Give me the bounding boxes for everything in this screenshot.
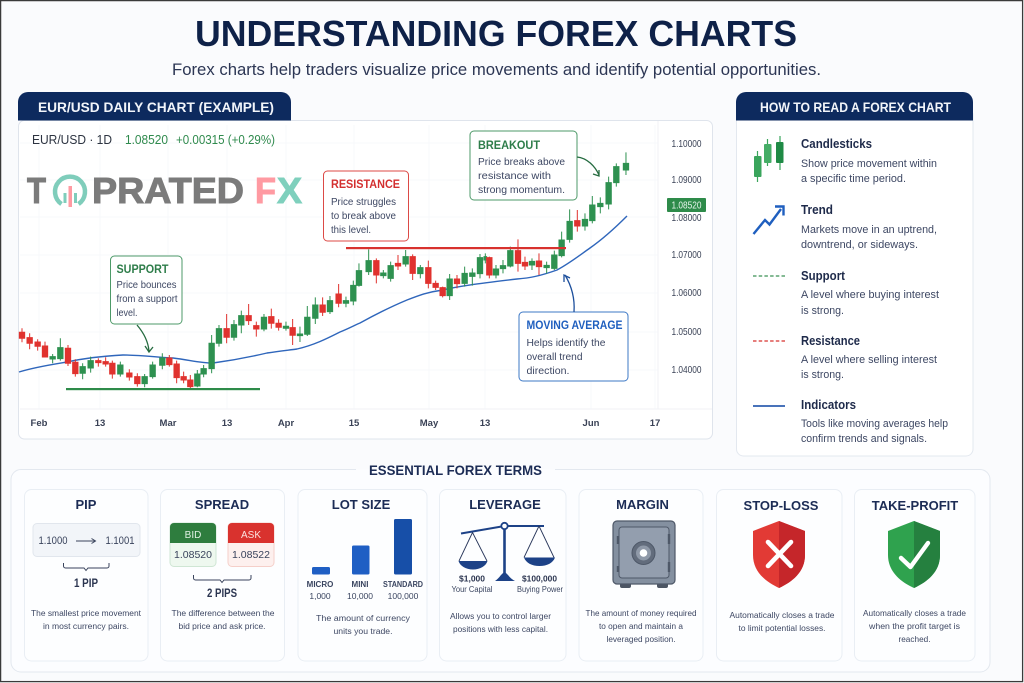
guide item: support: A level where buying interest	[801, 289, 939, 301]
chart tab heading	[18, 92, 291, 120]
price axis: 1.05000	[672, 326, 702, 338]
guide item: indicators: Tools like moving averages help	[801, 418, 948, 430]
guide tab heading	[736, 92, 973, 120]
card: leverage: $100,000	[522, 574, 557, 584]
guide item: trend: Trend	[801, 203, 833, 217]
card: take-profit: reached.	[898, 634, 930, 644]
red candles, first half	[19, 284, 341, 390]
watermark: PRATED	[92, 170, 244, 211]
date axis: 13	[95, 418, 105, 429]
candlesticks	[19, 152, 629, 390]
callout: resistance	[324, 171, 408, 241]
card: margin: The amount of money required	[586, 608, 697, 618]
guide item: indicators: Indicators	[801, 398, 856, 412]
price axis	[667, 138, 706, 376]
card: lot size: MICRO	[307, 580, 333, 589]
card: spread: SPREAD	[195, 497, 249, 512]
watermark logo ring	[55, 177, 85, 207]
callout: breakout	[470, 131, 599, 200]
watermark: T	[27, 170, 46, 211]
callout: moving average: Helps identify the	[526, 338, 606, 349]
ask box	[228, 523, 274, 566]
price axis: 1.10000	[672, 138, 702, 150]
card: spread: bid price and ask price.	[178, 621, 266, 631]
card: leverage: $1,000	[459, 574, 485, 584]
callout: moving average	[519, 275, 628, 381]
pip price box: 1.1000	[38, 535, 68, 547]
card: pip	[24, 490, 148, 661]
subtitle: Forex charts help traders visualize price movements and identify potential opportunities.	[172, 61, 821, 79]
date axis: 17	[650, 418, 660, 429]
card: lot size: LOT SIZE	[332, 497, 391, 512]
instrument header: EUR/USD · 1D	[32, 132, 112, 147]
moving average	[19, 216, 627, 372]
date axis: Mar	[160, 418, 177, 429]
icon: red shield with cross	[753, 521, 805, 588]
guide item: trend: downtrend, or sideways.	[801, 239, 918, 251]
callout: moving average: MOVING AVERAGE	[526, 318, 622, 332]
price axis: 1.04000	[672, 364, 702, 376]
card: spread: The difference between the	[172, 608, 275, 618]
instrument header: +0.00315 (+0.29%)	[176, 132, 275, 147]
card: lot size: MINI	[352, 580, 368, 589]
callout: support	[110, 256, 182, 352]
bid box: BID	[185, 530, 201, 541]
lot size bars	[312, 519, 412, 574]
card: pip: The smallest price movement	[31, 608, 142, 618]
card: spread	[160, 490, 284, 661]
callout: breakout: BREAKOUT	[478, 138, 541, 152]
guide item: resistance: is strong.	[801, 369, 844, 381]
card: leverage	[440, 490, 566, 661]
callout: support: SUPPORT	[116, 264, 168, 276]
card: leverage: Allows you to control larger	[450, 611, 551, 621]
price axis: 1.06000	[672, 287, 702, 299]
callout: support: level.	[116, 308, 138, 319]
guide item: indicators	[753, 398, 948, 445]
date axis: Jun	[583, 418, 600, 429]
chart tab heading: EUR/USD DAILY CHART (EXAMPLE)	[38, 100, 274, 115]
guide panel body	[736, 108, 973, 456]
card: lot size: 100,000	[388, 591, 419, 601]
card: lot size: units you trade.	[334, 626, 392, 636]
date axis: 13	[222, 418, 232, 429]
icon: red dashed line	[753, 340, 786, 342]
date axis: May	[420, 418, 439, 429]
card: stop-loss: to limit potential losses.	[738, 623, 826, 633]
callout: resistance: to break above	[331, 211, 396, 222]
card: margin: leveraged position.	[606, 634, 676, 644]
card: take-profit	[854, 490, 975, 661]
card: stop-loss: STOP-LOSS	[744, 498, 819, 513]
guide item: indicators: confirm trends and signals.	[801, 433, 927, 445]
callout: breakout: strong momentum.	[478, 185, 565, 196]
panel: essential forex terms	[11, 462, 990, 672]
price axis: 1.07000	[672, 249, 702, 261]
card: margin: MARGIN	[616, 497, 669, 512]
card: pip: 1 PIP	[74, 576, 98, 590]
date axis: Apr	[278, 418, 294, 429]
guide item: candlesticks	[754, 136, 937, 185]
date axis	[31, 418, 660, 429]
instrument header	[32, 132, 275, 147]
title: UNDERSTANDING FOREX CHARTS	[195, 13, 797, 54]
callout: moving average: direction.	[526, 366, 570, 377]
card: lot size: The amount of currency	[316, 613, 411, 623]
green candles, first half	[50, 263, 362, 387]
card: take-profit: when the profit target is	[868, 621, 960, 631]
guide item: trend: Markets move in an uptrend,	[801, 224, 937, 236]
icon: green dashed line	[753, 275, 786, 277]
date axis: 15	[349, 418, 360, 429]
guide item: candlesticks: Show price movement within	[801, 158, 937, 170]
watermark: X	[277, 170, 302, 211]
card: take-profit: Automatically closes a trade	[863, 608, 966, 618]
icon: green shield with check	[888, 521, 940, 588]
callout: moving average: overall trend	[526, 352, 582, 363]
price axis: 1.09000	[672, 174, 702, 186]
card: lot size	[298, 490, 427, 661]
callout: support: from a support	[116, 294, 178, 305]
price axis: 1.08000	[672, 212, 702, 224]
guide item: support: is strong.	[801, 305, 844, 317]
red candles, second half	[374, 210, 580, 297]
bid box: 1.08520	[174, 549, 212, 561]
green candles, second half	[366, 152, 629, 300]
support line	[66, 388, 260, 390]
ask box: ASK	[241, 530, 261, 541]
pip price box	[33, 524, 140, 556]
guide item: resistance	[753, 334, 937, 381]
callout: breakout: resistance with	[478, 171, 551, 182]
watermark: F	[255, 170, 276, 211]
card: margin	[579, 490, 703, 661]
icon: blue solid line	[753, 405, 785, 407]
card: margin: to open and maintain a	[599, 621, 683, 631]
icon: safe	[613, 521, 675, 588]
card: leverage: positions with less capital.	[453, 624, 548, 634]
pip price box: 1.1001	[106, 535, 134, 547]
callout: breakout: Price breaks above	[478, 157, 565, 168]
panel: EUR/USD chart	[18, 92, 712, 439]
panel: how to read a forex chart	[736, 92, 973, 456]
date axis: Feb	[31, 418, 48, 429]
guide item: support	[753, 269, 939, 317]
card: lot size: 10,000	[347, 591, 373, 601]
icon: balance scale	[458, 523, 555, 581]
card: lot size: 1,000	[309, 591, 331, 601]
guide item: candlesticks: Candlesticks	[801, 137, 872, 151]
guide item: trend	[754, 203, 937, 251]
instrument header: 1.08520	[125, 132, 168, 147]
guide item: candlesticks: a specific time period.	[801, 173, 906, 185]
card: leverage: Your Capital	[452, 585, 493, 594]
current price tag: 1.08520	[672, 200, 702, 212]
card: pip: in most currency pairs.	[43, 621, 129, 631]
card: pip: PIP	[76, 497, 97, 512]
card: lot size: STANDARD	[383, 580, 423, 589]
guide tab heading: HOW TO READ A FOREX CHART	[760, 100, 952, 115]
ask box: 1.08522	[232, 549, 270, 561]
card: take-profit: TAKE-PROFIT	[872, 498, 958, 513]
guide item: resistance: A level where selling interest	[801, 354, 937, 366]
callout: resistance: this level.	[331, 225, 371, 236]
callout: support: Price bounces	[116, 280, 176, 291]
card: leverage: LEVERAGE	[469, 497, 541, 512]
icon: candlesticks	[754, 136, 784, 182]
card: stop-loss: Automatically closes a trade	[730, 610, 835, 620]
card: leverage: Buying Power	[517, 585, 563, 594]
card: spread: 2 PIPS	[207, 586, 237, 600]
icon: trend arrow	[754, 206, 784, 234]
callout: resistance: Price struggles	[331, 197, 396, 208]
resistance line	[346, 247, 566, 249]
guide item: resistance: Resistance	[801, 334, 860, 348]
bid box	[170, 523, 216, 566]
chart panel body	[18, 120, 712, 439]
watermark	[27, 170, 302, 211]
date axis: 13	[480, 418, 490, 429]
guide item: support: Support	[801, 269, 846, 283]
section heading: ESSENTIAL FOREX TERMS	[369, 462, 542, 478]
card: stop-loss	[716, 490, 842, 661]
callout: resistance: RESISTANCE	[331, 179, 400, 191]
